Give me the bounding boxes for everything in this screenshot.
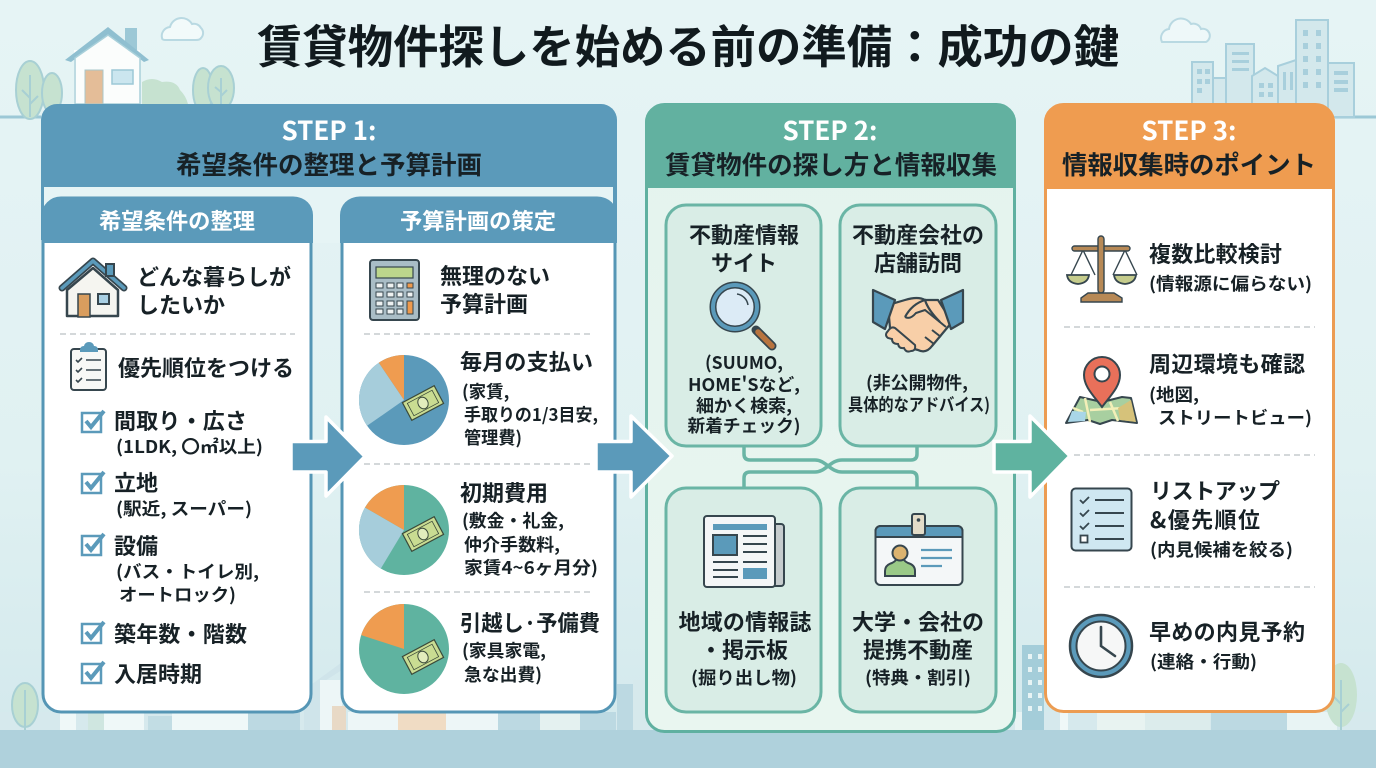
check item: 立地: (駅近, スーパー) [116,496,252,521]
STEP 2 heading: 賃貸物件の探し方と情報収集 [665,146,997,182]
connector between cards [744,446,917,487]
text: 初期費用 [460,476,598,580]
card: 地域の情報誌・掲示板 [666,488,821,712]
point: 複数比較検討: (情報源に偏らない) [1149,271,1312,296]
text: 初期費用: 初期費用 [460,476,548,508]
card: 不動産情報サイト: HOME'Sなど, [688,372,800,397]
text: どんな暮らしがしたいか: したいか [137,288,225,320]
checklist: 希望条件 [82,404,263,689]
card: 大学・会社の提携不動産: 大学・会社の [852,605,984,637]
check item: 間取り・広さ [82,404,263,459]
text: 引越し・予備費: 引越し·予備費 [460,606,600,638]
icon: magnifier [713,285,772,346]
card: 不動産情報サイト [666,205,821,446]
text: 優先順位をつける: 優先順位をつける [118,351,294,383]
check item: 築年数・階数: 築年数・階数 [114,617,247,649]
text: 無理のない予算計画: 無理のない [440,259,550,291]
point: 早めの内見予約: 早めの内見予約 [1149,615,1305,647]
background: city skyline top right [1161,18,1354,117]
text: 引越し・予備費 [460,606,600,687]
card: 不動産情報サイト: 細かく検索, [696,393,792,418]
text: どんな暮らしがしたいか: どんな暮らしが [137,260,291,292]
point: 早めの内見予約 [1070,615,1305,677]
text: どんな暮らしがしたいか [137,260,291,320]
card: 地域の情報誌・掲示板: (掘り出し物) [691,665,797,690]
card: 地域の情報誌・掲示板: 地域の情報誌 [678,605,812,637]
card: 不動産情報サイト: 新着チェック) [688,413,800,438]
point: 周辺環境も確認: ストリートビュー) [1158,405,1312,430]
STEP 3 heading: STEP 3: [1142,111,1236,148]
STEP 1 heading: 希望条件の整理と予算計画 [176,146,482,182]
icon: handshake [873,290,963,352]
point: リストアップ&優先順位: (内見候補を絞る) [1150,537,1293,562]
sub-panel: 希望条件の整理 [42,197,313,712]
icon: house [62,261,124,317]
arrow: STEP 1 inner [291,417,365,496]
card: 不動産情報サイト: サイト [711,246,777,278]
panel: STEP 2 [645,104,1016,732]
card: 不動産会社の店舗訪問: (非公開物件, [866,370,968,395]
check item: 設備 [82,529,259,607]
text: 初期費用: 仲介手数料, [464,532,560,557]
pie chart: 初期費用 [359,485,449,575]
point: 早めの内見予約: (連絡・行動) [1150,649,1257,674]
text: 無理のない予算計画: 予算計画 [440,287,528,319]
panel: STEP 1 [41,104,617,712]
text: 毎月の支払い [460,345,598,450]
card: 不動産会社の店舗訪問: 不動産会社の [852,218,984,250]
STEP 1 heading: STEP 1: [282,111,376,148]
icon: clipboard [71,342,106,390]
check item: 間取り・広さ: (1LDK, 〇㎡以上) [116,434,263,459]
text: 初期費用: (敷金・礼金, [462,508,564,533]
icon: ID card [876,514,962,585]
text: 初期費用: 家賃4~6ヶ月分) [464,555,598,580]
text: 無理のない予算計画 [440,259,550,319]
text: 引越し・予備費: (家具家電, [462,638,546,663]
text: 毎月の支払い: 管理費) [464,425,522,450]
sub-heading: 予算計画の策定 [400,204,556,236]
STEP 2 heading [665,111,997,182]
point: 周辺環境も確認 [1066,347,1312,430]
STEP 1 panel frame [41,104,617,240]
check item: 設備: (バス・トイレ別, [116,559,259,584]
STEP 3 heading [1062,111,1316,182]
point: 周辺環境も確認: 周辺環境も確認 [1149,347,1305,379]
check item: 立地 [82,466,252,521]
icon: clock [1070,615,1132,677]
arrow: STEP 2 to STEP 3 [994,416,1070,497]
background: house scene top left [0,18,1376,119]
point: 周辺環境も確認: (地図, [1149,382,1199,407]
card: 不動産情報サイト: (SUUMO, [705,350,783,375]
point: リストアップ&優先順位: &優先順位 [1150,503,1260,535]
card: 大学・会社の提携不動産: (特典・割引) [865,665,971,690]
check item: 設備: 設備 [114,529,158,561]
text: 毎月の支払い: (家賃, [462,379,509,404]
STEP 1 heading [176,111,482,182]
check item: 立地: 立地 [114,466,158,498]
check item: 間取り・広さ: 間取り・広さ [114,404,247,436]
card: 大学・会社の提携不動産 [840,488,996,712]
icon: checklist [1072,488,1132,550]
text: 引越し・予備費: 急な出費) [464,662,542,687]
card: 地域の情報誌・掲示板: ・掲示板 [700,633,788,665]
icon: newspaper [704,516,784,587]
text: 毎月の支払い: 毎月の支払い [460,345,593,377]
card: 不動産会社の店舗訪問: 具体的なアドバイス) [848,392,990,417]
title: 賃貸物件探しを始める前の準備：成功の鍵 [257,11,1119,77]
STEP 3 heading: 情報収集時のポイント [1062,146,1316,182]
panel: STEP 3 [1044,104,1335,712]
card: 不動産会社の店舗訪問 [840,205,996,446]
card: 不動産会社の店舗訪問: 店舗訪問 [874,246,962,278]
pie chart: 引越し・予備費 [359,604,449,694]
icon: scales [1067,236,1137,302]
icon: calculator [370,260,419,320]
point: リストアップ&優先順位: リストアップ [1150,474,1280,506]
point: リストアップ&優先順位 [1072,474,1293,562]
point: 複数比較検討: 複数比較検討 [1149,237,1282,269]
card: 大学・会社の提携不動産: 提携不動産 [863,633,973,665]
check item: 入居時期: 入居時期 [114,657,202,689]
background: faded town along the bottom [0,645,1376,730]
STEP 2 heading: STEP 2: [783,111,877,148]
point: 複数比較検討 [1067,236,1312,302]
card: 不動産情報サイト: 不動産情報 [689,218,799,250]
icon: map pin [1066,357,1137,424]
background: ground band [0,730,1376,768]
sub-heading: 希望条件の整理 [99,204,255,236]
check item: 設備: オートロック) [119,582,236,607]
pie chart: 毎月の支払い [359,355,449,445]
arrow: STEP 1 to STEP 2 [596,416,672,497]
text: 毎月の支払い: 手取りの1/3目安, [464,402,598,427]
sub-panel: 予算計画の策定 [340,197,617,712]
